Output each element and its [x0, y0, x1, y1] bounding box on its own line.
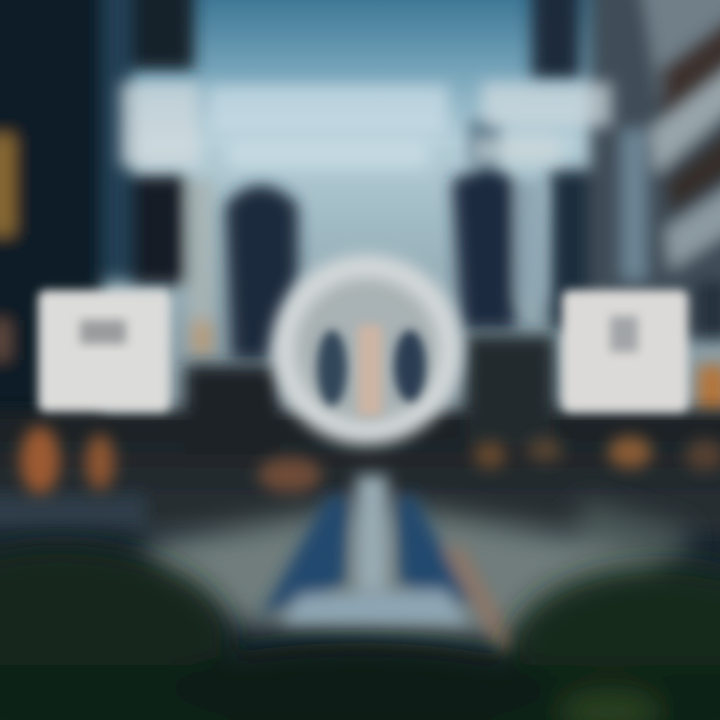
ground dark band [0, 335, 720, 530]
foliage foreground [0, 545, 720, 720]
emblem left figure [317, 330, 347, 406]
card: right [562, 290, 688, 412]
plaza walkway [140, 500, 690, 640]
right buildings [532, 0, 720, 415]
left buildings [0, 0, 212, 520]
emblem center pillar [358, 325, 382, 415]
right card icon [610, 316, 638, 352]
left card icon [80, 320, 126, 344]
central circle emblem [283, 266, 451, 434]
title block [120, 82, 612, 168]
card: left [38, 290, 170, 412]
central towers [225, 120, 544, 360]
warm lights [20, 426, 720, 494]
plaza blue path [262, 475, 520, 655]
sky background [0, 0, 720, 420]
emblem right figure [394, 330, 426, 402]
